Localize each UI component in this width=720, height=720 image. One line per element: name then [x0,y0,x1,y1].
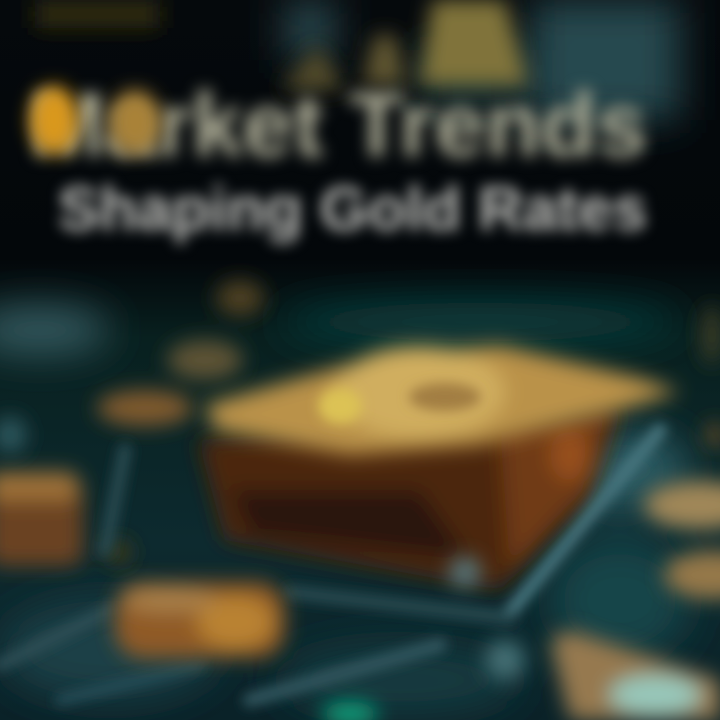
right coins [644,422,720,599]
bottom right bottle [550,630,720,720]
title: Market Trends [30,75,647,176]
gold coins in title [16,72,170,168]
teal diagonal bars [0,430,660,700]
small blurred gold pieces [0,280,720,566]
top gold towers [35,0,528,90]
subtitle: Shaping Gold Rates [58,175,647,244]
lower teal haze [0,302,690,715]
lower gold bar [115,582,285,658]
main gold block [198,405,620,590]
top teal columns [285,0,680,120]
